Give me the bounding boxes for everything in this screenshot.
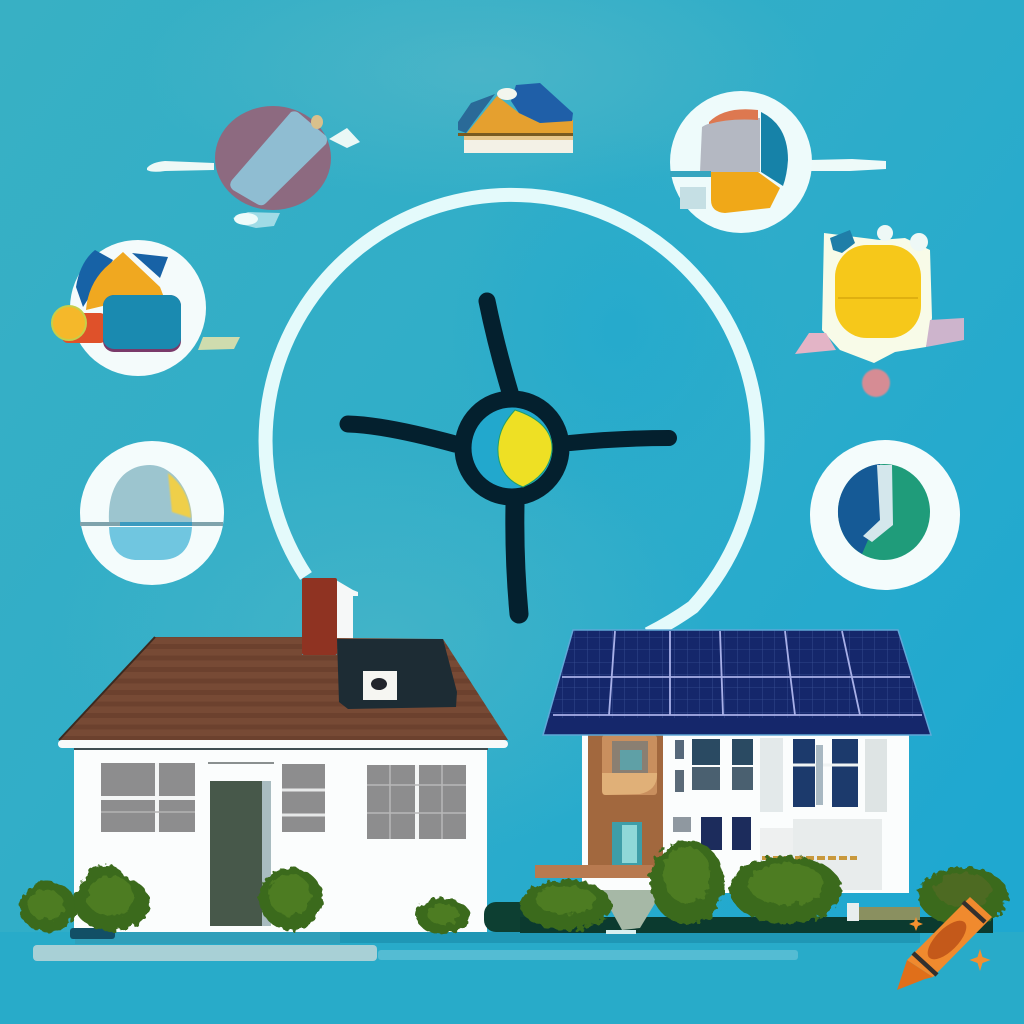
red block <box>62 313 106 343</box>
bushes <box>19 840 1008 939</box>
icon: left circle <box>80 441 224 585</box>
orange cap <box>709 109 758 124</box>
turbine <box>348 301 669 614</box>
disc <box>70 240 206 376</box>
clock face <box>838 464 930 560</box>
icon: top left globe <box>147 106 360 228</box>
yellow sliver <box>168 473 191 518</box>
window left <box>101 763 195 832</box>
icon: upper right sun <box>795 225 964 397</box>
house: left <box>58 578 508 932</box>
clock blue sector <box>838 464 885 554</box>
upper bay window <box>602 735 657 795</box>
upper shape <box>109 465 192 522</box>
yellow circle <box>52 306 86 340</box>
lower blob <box>233 212 280 228</box>
disc <box>670 91 812 233</box>
icon: top right <box>670 91 886 233</box>
walls <box>74 750 487 932</box>
window middle <box>282 764 325 832</box>
roof <box>59 637 508 740</box>
disc <box>80 441 224 585</box>
lower windows <box>673 817 751 850</box>
blue corner <box>830 230 855 253</box>
orange hill <box>466 96 573 134</box>
upper windows <box>675 738 887 812</box>
light strip <box>378 950 798 960</box>
yellow body <box>835 245 921 338</box>
icon: top centre <box>458 83 573 153</box>
blue left shape <box>458 94 495 133</box>
chimney <box>302 578 358 655</box>
eave <box>58 740 508 748</box>
small bird shape <box>329 128 360 148</box>
disc <box>810 440 960 590</box>
grey panel <box>700 118 760 172</box>
sparkles <box>909 917 990 971</box>
bush foliage highlights <box>28 847 991 924</box>
blue right shape <box>511 83 573 123</box>
hedge base <box>70 865 993 939</box>
brick section <box>588 733 663 867</box>
crayon oval <box>922 915 972 965</box>
solar roof <box>543 630 931 735</box>
blue panel <box>103 295 181 352</box>
globe band <box>230 111 327 205</box>
pink left <box>795 333 836 354</box>
teal door <box>612 822 642 866</box>
white peak <box>497 88 517 100</box>
pink right <box>926 318 964 347</box>
blue wedges <box>76 250 113 307</box>
icon: upper left circle <box>52 240 240 376</box>
small orange mark <box>311 115 323 129</box>
orange roof <box>86 252 165 310</box>
globe arm <box>147 161 214 172</box>
yellow block <box>711 172 780 213</box>
dormer <box>337 639 457 709</box>
bush foliage dark <box>19 840 1008 934</box>
ground <box>0 932 1024 1024</box>
icon: crayon watermark <box>897 897 992 990</box>
walls <box>582 733 909 893</box>
clock hands <box>863 465 893 542</box>
horizon line <box>80 522 223 526</box>
hub lemon <box>498 410 552 487</box>
walkway <box>33 945 377 961</box>
crayon body <box>907 897 992 977</box>
turbine blades <box>348 301 669 614</box>
white body <box>822 233 932 363</box>
turbine hub <box>463 399 561 497</box>
arm <box>810 159 886 171</box>
crayon tip <box>897 960 933 990</box>
house: right solar <box>543 630 931 893</box>
large ring <box>266 195 758 634</box>
crayon bands <box>913 902 985 975</box>
small pane <box>680 187 706 209</box>
door <box>208 762 274 926</box>
icon: right clock <box>810 440 960 590</box>
base <box>464 134 573 153</box>
lower panel <box>760 819 882 890</box>
blue panel <box>761 112 788 186</box>
teal strip <box>670 171 711 177</box>
pale tab <box>198 337 240 350</box>
window right <box>367 765 466 839</box>
globe disc <box>215 106 331 210</box>
pink dot <box>862 369 890 397</box>
lower shape <box>109 527 192 560</box>
